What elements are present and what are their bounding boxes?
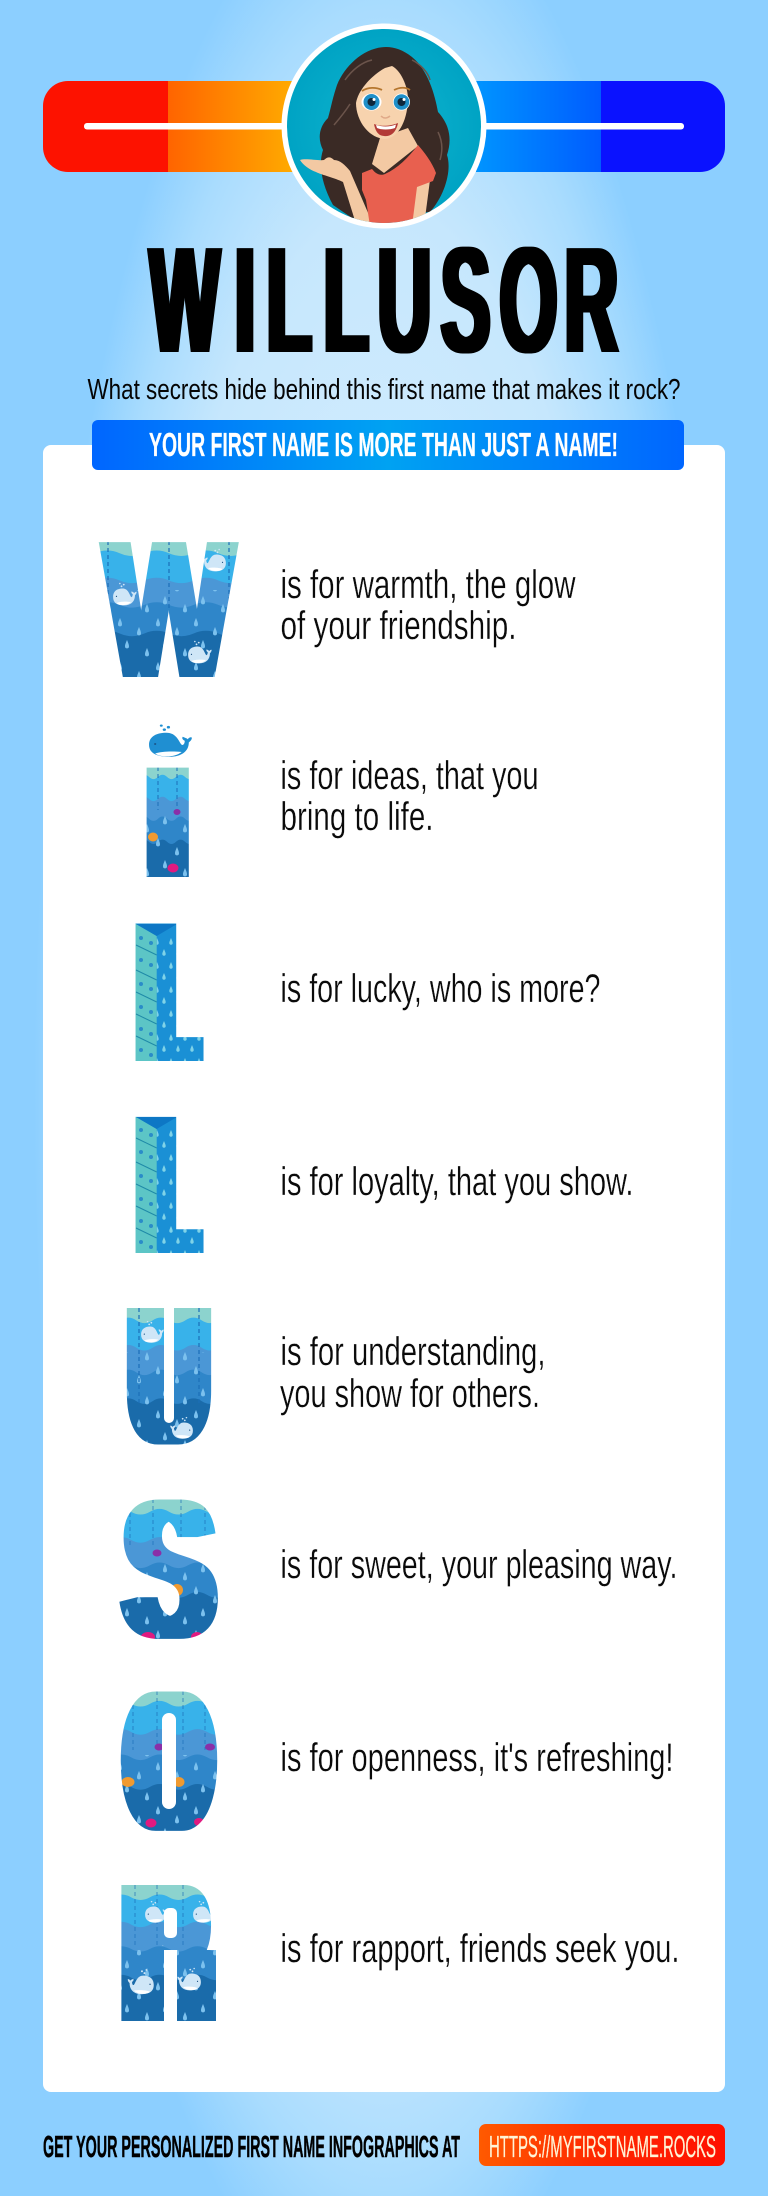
panel: white content card bbox=[43, 445, 725, 2092]
letter I illustration bbox=[146, 724, 192, 877]
letter L illustration (second) bbox=[136, 1116, 204, 1253]
letter U illustration bbox=[126, 1308, 212, 1444]
letter S illustration bbox=[119, 1500, 218, 1639]
header slider bar bbox=[43, 81, 725, 172]
letter R illustration bbox=[121, 1885, 216, 2021]
text: W line bbox=[280, 563, 576, 648]
banner bbox=[92, 420, 684, 470]
text: I line: bring to life. bbox=[280, 795, 434, 839]
letter W illustration bbox=[95, 541, 243, 677]
text: U line: you show for others. bbox=[280, 1372, 540, 1416]
letter O illustration bbox=[120, 1692, 218, 1831]
text: second L line: is for loyalty, that you show. bbox=[280, 1160, 634, 1204]
text: I line: is for ideas, that you bbox=[280, 754, 538, 798]
footer URL badge bbox=[479, 2124, 725, 2166]
title: WILLUSOR bbox=[150, 216, 618, 385]
text: W line: is for warmth, the glow bbox=[280, 563, 576, 607]
text: I line bbox=[280, 754, 538, 839]
text: U line bbox=[280, 1330, 546, 1416]
text: W line: of your friendship. bbox=[280, 604, 516, 648]
text: L line: is for lucky, who is more? bbox=[280, 967, 600, 1011]
portrait: cartoon woman in circle bbox=[282, 24, 486, 228]
letter L illustration bbox=[136, 924, 204, 1061]
text: U line: is for understanding, bbox=[280, 1330, 546, 1374]
